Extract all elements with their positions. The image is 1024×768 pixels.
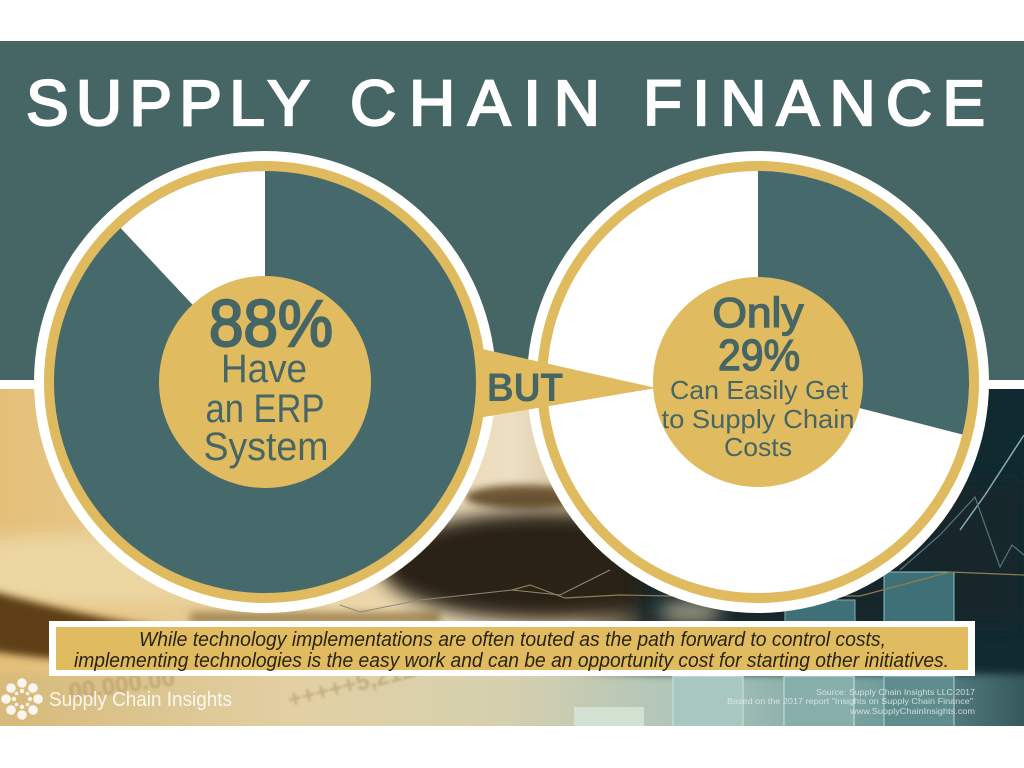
callout banner: While technology implementations are often touted as the path forward to control costs,	[139, 628, 886, 651]
icon: radial dots	[1, 678, 43, 720]
right center stat: Costs	[724, 432, 792, 462]
logo: Supply Chain Insights: Supply Chain Insights	[49, 689, 232, 711]
left pie chart: 88%	[34, 151, 496, 613]
background photo: coins, paper and chart: +++++5,212.9	[285, 651, 437, 714]
callout banner: implementing technologies is the easy work and can be an opportunity cost for starting other initiatives.	[74, 649, 949, 672]
logo: Supply Chain Insights	[1, 678, 232, 720]
title: CHAIN	[350, 67, 600, 139]
right center stat: Only	[712, 289, 804, 336]
background photo: coins, paper and chart: 00,000.00	[67, 664, 177, 706]
right pie chart: 29%	[527, 151, 989, 613]
left center stat	[159, 276, 371, 488]
source note: Based on the 2017 report "Insights on Supply Chain Finance"	[727, 696, 973, 706]
source note	[727, 687, 975, 716]
source note: www.SupplyChainInsights.com	[849, 706, 975, 716]
callout banner	[49, 621, 975, 676]
connector arrow with BUT: BUT	[487, 366, 563, 410]
left center stat: Have	[221, 347, 307, 391]
title: SUPPLY	[26, 67, 310, 139]
left center stat: System	[204, 425, 328, 469]
right center stat	[653, 277, 863, 487]
source note: Source: Supply Chain Insights LLC 2017	[816, 687, 975, 697]
title: FINANCE	[643, 67, 985, 139]
background photo: coins, paper and chart	[0, 389, 1024, 744]
title	[26, 67, 985, 139]
connector arrow with BUT	[478, 348, 656, 418]
left center stat: an ERP	[206, 387, 324, 431]
right center stat: 29%	[718, 331, 800, 380]
left center stat: 88%	[209, 286, 333, 360]
header band	[0, 41, 1024, 380]
right center stat: to Supply Chain	[662, 404, 854, 434]
right center stat: Can Easily Get	[670, 375, 849, 405]
